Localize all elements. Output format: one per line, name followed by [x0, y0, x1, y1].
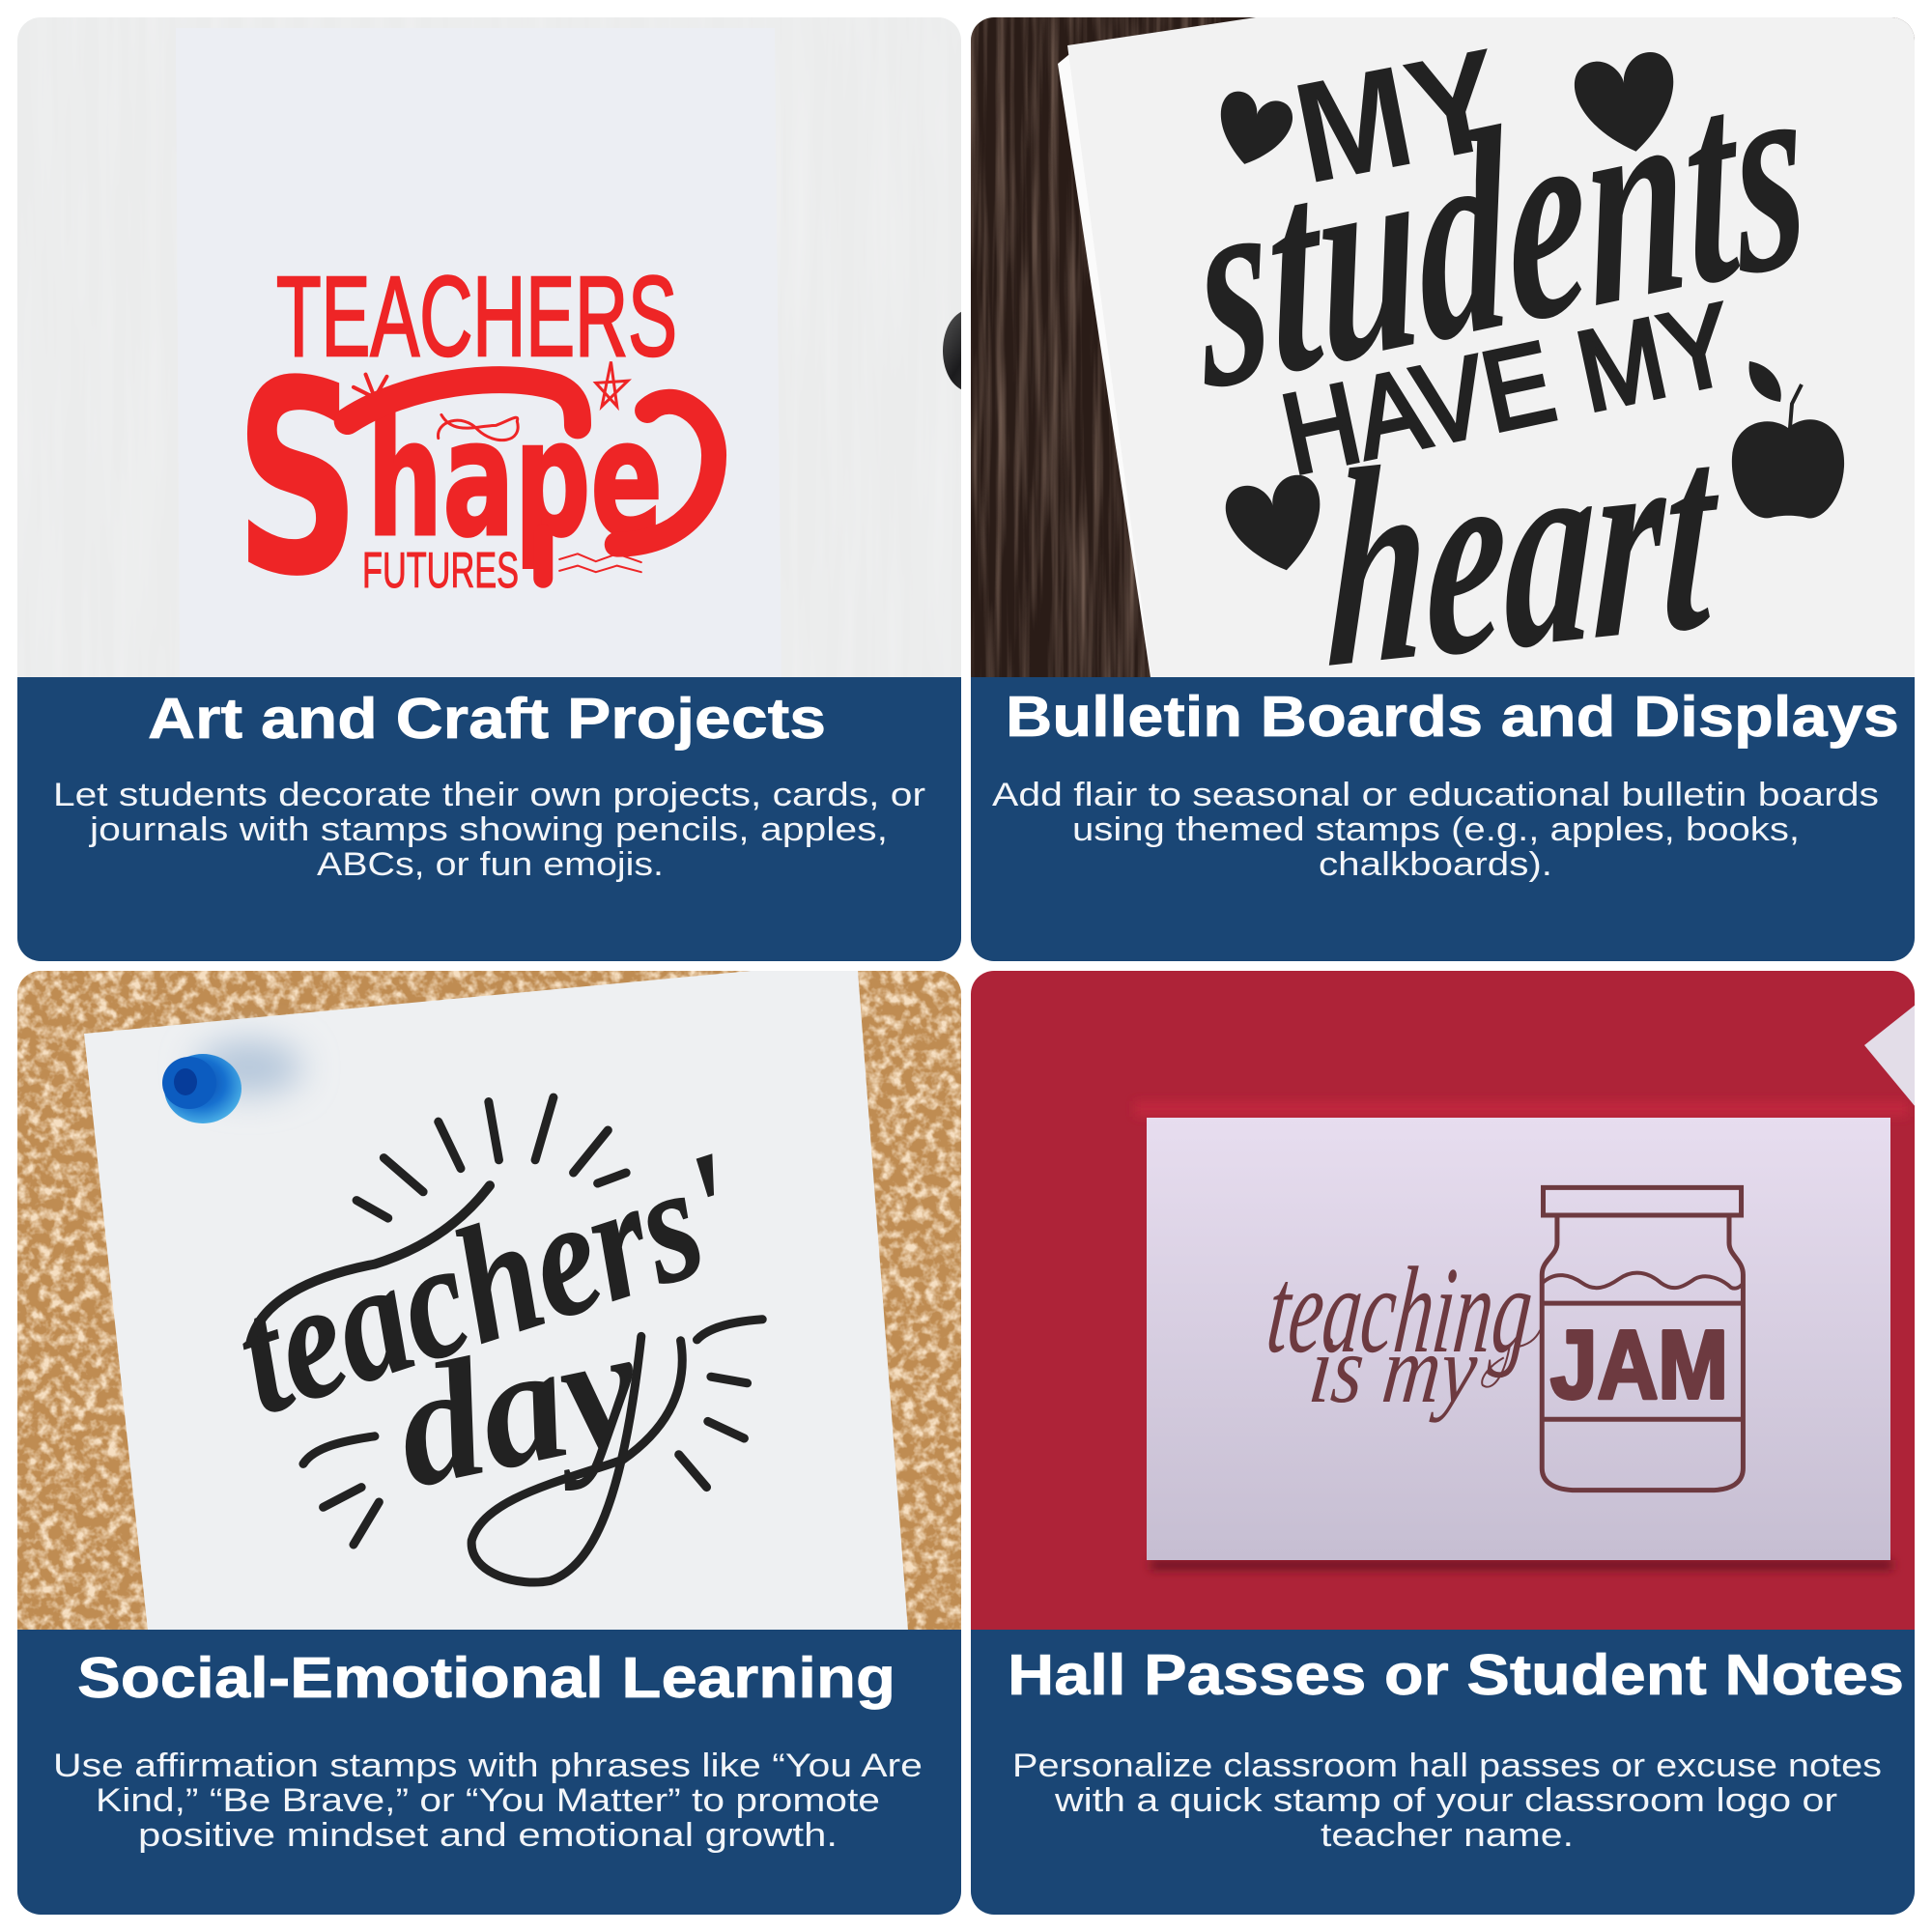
- photo: white board with red stamped card: [17, 17, 995, 694]
- description: Use affirmation stamps with phrases like “You Are: [53, 1747, 923, 1784]
- panel: hall passes or student notes: [971, 971, 1916, 1915]
- stamp lettering: teachers shape futures: hape: [367, 386, 663, 573]
- description: [1012, 1747, 1882, 1854]
- paper note: [84, 971, 908, 1631]
- stamp lettering: teachers shape futures: [247, 274, 726, 588]
- stamp lettering: teachers shape futures: TEACHERS: [276, 253, 677, 381]
- stamp: teaching is my jam: [1262, 1187, 1743, 1491]
- stamp lettering: teachers' day: day: [380, 1290, 656, 1523]
- stamp: teaching is my jam: teaching: [1262, 1241, 1539, 1378]
- icon: blue push pin: [162, 1054, 242, 1123]
- stamp: teaching is my jam: JAM: [1550, 1311, 1728, 1419]
- icon: apple: [1732, 361, 1844, 518]
- heading: Hall Passes or Student Notes: [1008, 1643, 1904, 1707]
- panel: art and craft projects: [17, 17, 995, 961]
- stamp lettering: teachers shape futures: S: [235, 325, 360, 636]
- heading: Bulletin Boards and Displays: [1006, 685, 1899, 749]
- description: journals with stamps showing pencils, apples,: [89, 811, 888, 848]
- stamp lettering: my students have my heart: HAVE MY: [1271, 279, 1745, 499]
- paper card: [176, 28, 781, 677]
- burst rays and swashes: [250, 1097, 762, 1582]
- panel: social-emotional learning: [17, 971, 961, 1915]
- caption band: [17, 677, 961, 961]
- description: Personalize classroom hall passes or excuse notes: [1012, 1747, 1882, 1784]
- photo: note pinned on cork board: [17, 971, 961, 1647]
- photo: stamped card on red background: [971, 971, 1916, 1647]
- description: [53, 777, 925, 883]
- swashes and ornaments: [348, 361, 714, 579]
- description: Add flair to seasonal or educational bulletin boards: [992, 777, 1879, 813]
- description: using themed stamps (e.g., apples, books,: [1072, 811, 1800, 848]
- caption band: [971, 1630, 1916, 1915]
- stamp lettering: my students have my heart: MY: [1283, 18, 1514, 214]
- heading: Art and Craft Projects: [148, 687, 826, 751]
- stamp lettering: teachers shape futures: FUTURES: [362, 543, 519, 599]
- card shadow: [1151, 1560, 1892, 1570]
- description: positive mindset and emotional growth.: [138, 1817, 838, 1854]
- description: with a quick stamp of your classroom logo or: [1054, 1782, 1837, 1819]
- photo: paper on dark wood with black stamp: [971, 5, 1916, 727]
- description: ABCs, or fun emojis.: [317, 846, 664, 883]
- paper sheets: [1058, 54, 1151, 677]
- description: Let students decorate their own projects, cards, or: [53, 777, 925, 813]
- icon: hearts: [1221, 91, 1293, 164]
- caption band: [17, 1630, 961, 1915]
- white card: [1147, 1118, 1890, 1560]
- corner of second card: [1864, 1005, 1916, 1107]
- stamp lettering: teachers' day: teachers': [215, 1118, 759, 1450]
- black door knob: [943, 311, 961, 390]
- description: [53, 1747, 923, 1854]
- stamp lettering: my students have my heart: [1204, 48, 1845, 666]
- description: Kind,” “Be Brave,” or “You Matter” to promote: [96, 1782, 880, 1819]
- pin shadow: [196, 1040, 302, 1094]
- stamp lettering: my students have my heart: heart: [1323, 374, 1724, 727]
- caption band: [971, 677, 1916, 961]
- description: [992, 777, 1879, 883]
- stamp: teaching is my jam: is my: [1305, 1316, 1483, 1423]
- icon: jam jar: [1482, 1187, 1743, 1491]
- description: chalkboards).: [1319, 846, 1552, 883]
- stamp lettering: teachers' day: [215, 1097, 762, 1582]
- description: teacher name.: [1321, 1817, 1574, 1854]
- panel: bulletin boards and displays: [971, 5, 1916, 961]
- heading: Social-Emotional Learning: [77, 1646, 895, 1710]
